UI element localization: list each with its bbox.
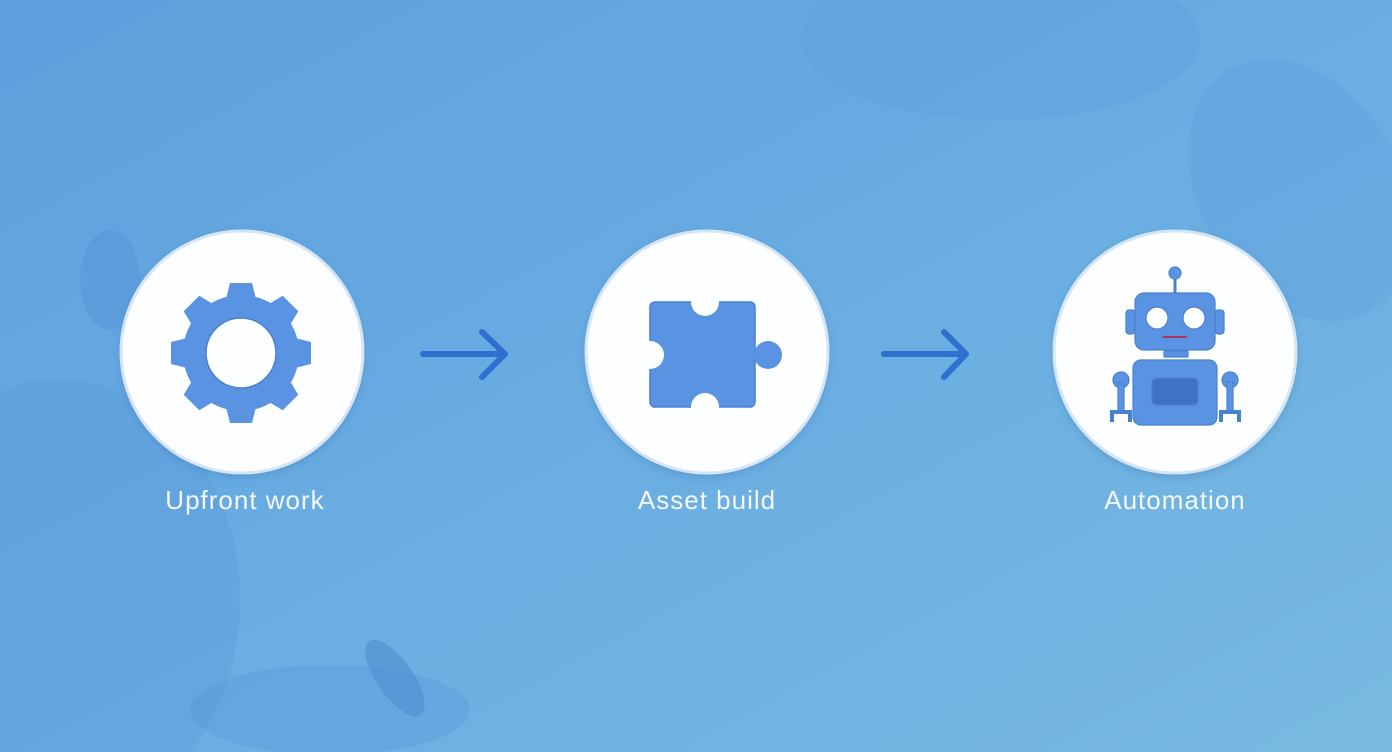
step 3: automation [1054,231,1296,515]
circle: automation [1054,231,1296,473]
arrow 1 [423,332,505,377]
circle: upfront work [121,231,363,473]
arrow 2 [884,332,966,377]
label: asset build: Asset build [638,485,776,515]
label: automation: Automation [1104,485,1246,515]
circle: asset build [586,231,828,473]
icon: gear [171,283,311,423]
label: upfront work: Upfront work [165,485,325,515]
icon: robot [1112,267,1239,425]
icon: puzzle [636,288,782,421]
step 2: asset build [586,231,828,515]
step 1: upfront work [121,231,363,515]
